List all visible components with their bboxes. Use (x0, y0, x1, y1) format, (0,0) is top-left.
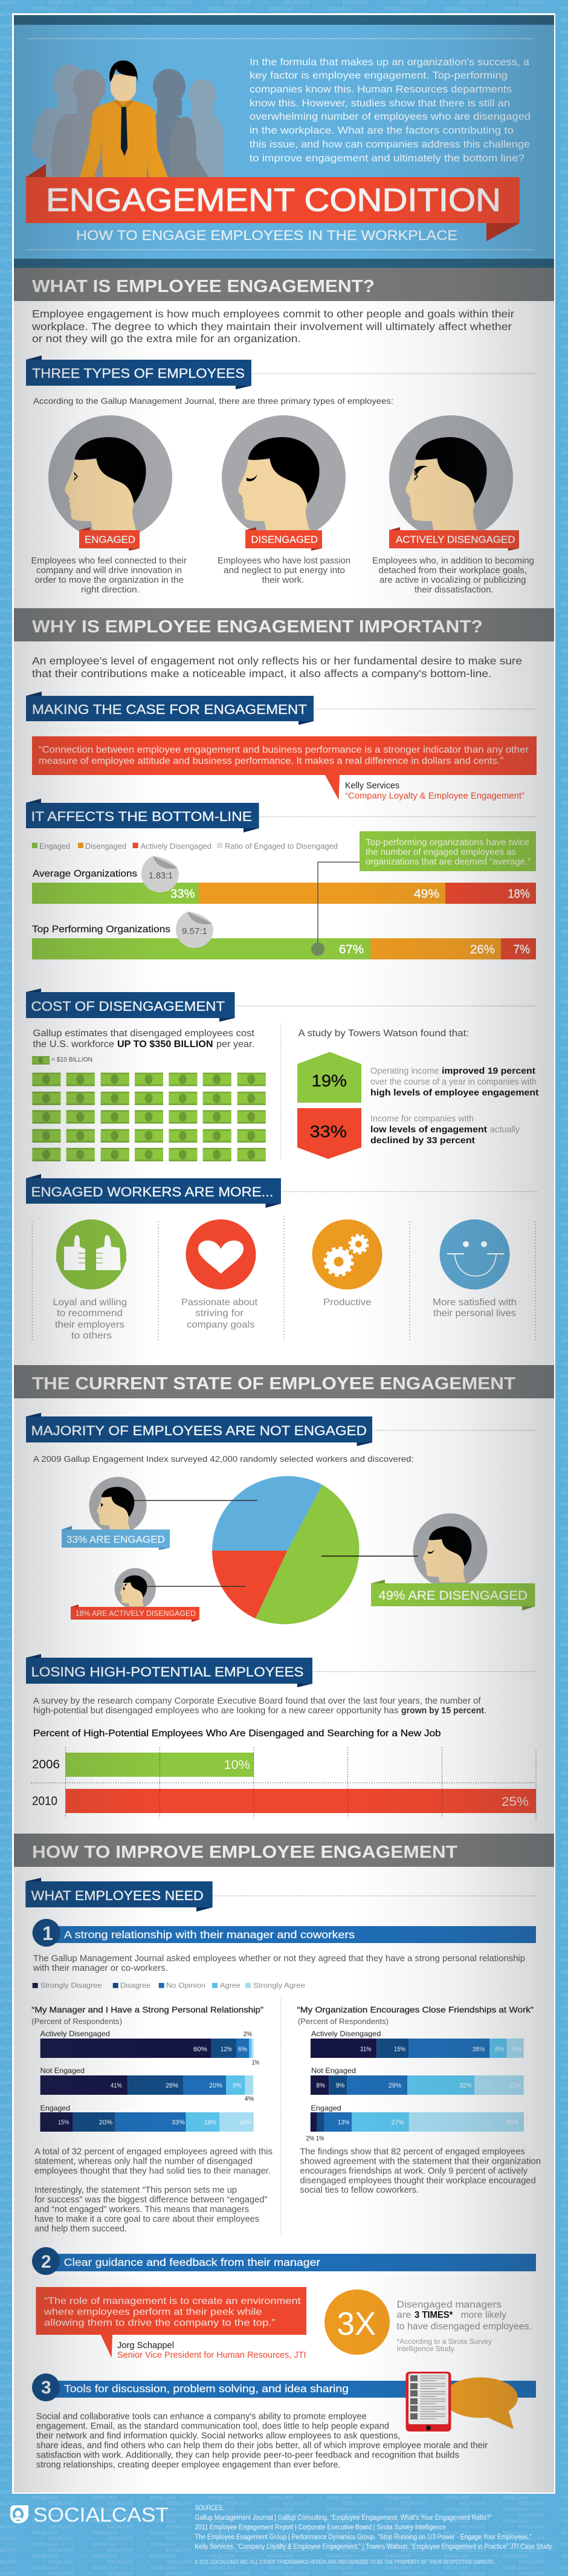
chart: manager relationship (31, 2005, 263, 2132)
text block: why important (32, 655, 522, 680)
panel: loyal: to recommend (57, 1308, 123, 1319)
panel: loyal: to others (71, 1331, 112, 1341)
text block: corporate executive board survey: . (484, 1706, 486, 1716)
section heading: current state: THE CURRENT STATE OF EMPLOYEE ENGAGEMENT (32, 1374, 515, 1393)
text block: manager findings: employees thought that they had solid ties to their manager. (34, 2166, 271, 2176)
panel: disengaged employee: Employees who have lost passion (218, 556, 350, 566)
stat: 19 percent: high levels of employee engagement (370, 1088, 539, 1098)
text block: manager findings (34, 2147, 273, 2234)
ribbon: what employees need: WHAT EMPLOYEES NEED (31, 1888, 204, 1903)
legend: bill equals ten billion: = $10 BILLION (51, 1056, 92, 1063)
panel: disengaged employee (218, 415, 350, 585)
text: towers watson intro: A study by Towers Watson found that: (299, 1028, 469, 1039)
step 3 banner: 3 (41, 2378, 51, 2398)
panel: actively disengaged employee: their dissatisfaction. (415, 585, 493, 595)
ribbon: cost of disengagement (26, 988, 234, 1022)
stat: 19 percent: Operating income (370, 1066, 439, 1076)
intro text: overwhelming number of employees who are disengaged (250, 111, 531, 122)
panel: passionate (181, 1219, 258, 1330)
stacked bar: not engaged (40, 2066, 254, 2103)
text block: cost estimate: per year. (216, 1039, 254, 1050)
text block: gallup question: The Gallup Management Journal asked employees whether or not they agreed that they have a strong personal relationship (33, 1954, 525, 1964)
callout: Kelly Services quote: “Company Loyalty & Employee Engagement” (345, 791, 524, 801)
stat: 19 percent (297, 1052, 539, 1103)
panel: passionate: Passionate about (181, 1297, 258, 1308)
stacked bar: engaged: 55% (506, 2119, 519, 2126)
stat: 33 percent: declined by 33 percent (370, 1136, 475, 1146)
stat: 19 percent: 19% (312, 1071, 347, 1090)
stacked bar: actively disengaged: 15% (394, 2046, 405, 2053)
ribbon: engaged workers are more (26, 1174, 281, 1208)
stacked bar: actively disengaged: 12% (221, 2046, 232, 2053)
panel: satisfied: More satisfied with (433, 1297, 517, 1308)
text block: cost estimate: UP TO $350 BILLION (117, 1039, 213, 1050)
text block: social tools: satisfaction with work. Additionally, they can help provide peer-to-peer feedback and recognition that builds (36, 2451, 459, 2461)
bar chart: average organizations: Average Organizations (33, 869, 137, 879)
stacked bar: not engaged: 20% (209, 2082, 222, 2089)
text block: social tools (36, 2412, 488, 2470)
ribbon: what employees need (25, 1878, 213, 1912)
stat: 33 percent: low levels of engagement (370, 1125, 487, 1135)
text block: social tools: strong relationships, creating deeper employee engagement than ever before. (36, 2461, 341, 2470)
stacked bar: not engaged: 32% (459, 2082, 472, 2089)
text block: friendship findings: The findings show that 82 percent of engaged employees (300, 2147, 525, 2156)
chart: organization friendships: (Percent of Respondents) (298, 2017, 389, 2026)
callout: Kelly Services quote: “Connection between employee engagement and business performance is a stronger indicator than any other (39, 745, 529, 755)
callout: 33 percent engaged: 33% ARE ENGAGED (66, 1534, 165, 1545)
stacked bar: actively disengaged: 31% (360, 2046, 371, 2053)
text block: friendship findings: social ties to fellow coworkers. (300, 2185, 419, 2195)
ratio badge: 9.57:1 (176, 912, 213, 948)
step 1 banner: A strong relationship with their manager and coworkers (64, 1929, 355, 1941)
legend: engagement categories: Actively Disengaged (141, 842, 211, 851)
section heading: what is employee engagement (14, 268, 554, 301)
stacked bar: actively disengaged: 38% (473, 2046, 485, 2053)
pie chart (212, 1476, 359, 1624)
intro text (250, 57, 531, 164)
section heading: how to improve: HOW TO IMPROVE EMPLOYEE ENGAGEMENT (32, 1843, 457, 1862)
ratio badge: 1.83:1: 1.83:1 (149, 871, 173, 881)
text block: corporate executive board survey: A survey by the research company Corporate Executive Board found that over the last four years, the number of (33, 1696, 482, 1706)
chart: manager relationship: “My Manager and I Have a Strong Personal Relationship” (31, 2005, 263, 2014)
text block: social tools: their network and find information quickly. Social networks allow employees to ask questions, (36, 2432, 400, 2441)
legend: agreement scale: Disagree (120, 1981, 150, 1990)
text block: manager findings: and “not engaged” workers. This means that managers (34, 2205, 249, 2214)
panel: satisfied: their personal lives (433, 1308, 516, 1319)
ratio badge: 1.83:1 (141, 856, 179, 892)
icon: heart (186, 1219, 256, 1290)
stacked bar: actively disengaged: 2% (244, 2031, 252, 2038)
legend: agreement scale: Strongly Agree (253, 1981, 305, 1990)
stacked bar: not engaged (311, 2066, 524, 2095)
text block: gallup question (33, 1954, 525, 1973)
text block: definition (31, 308, 514, 345)
step 3 banner: Tools for discussion, problem solving, and idea sharing (64, 2383, 349, 2395)
stat: 33 percent: 33% (310, 1122, 347, 1141)
chart: manager relationship: (Percent of Respondents) (31, 2017, 122, 2026)
icon: phone with speech bubble (406, 2372, 518, 2432)
bar chart: top performing organizations: 7% (514, 943, 530, 956)
icon: thumbs up (56, 1219, 126, 1290)
section heading: why is employee engagement important (14, 608, 554, 641)
stacked bar: actively disengaged: Actively Disengaged (40, 2029, 110, 2038)
bar chart: high-potential employees (31, 1747, 536, 1821)
panel: actively disengaged employee: Employees who, in addition to becoming (372, 556, 534, 566)
ribbon: making the case for engagement (26, 692, 314, 725)
callout: 18 percent actively disengaged: 18% ARE ACTIVELY DISENGAGED (76, 1609, 196, 1618)
panel: actively disengaged employee (372, 415, 534, 595)
stacked bar: engaged (306, 2104, 524, 2143)
stacked bar: actively disengaged (40, 2029, 259, 2066)
legend: bill equals ten billion (32, 1056, 92, 1065)
ribbon: it affects the bottom-line (26, 799, 259, 832)
stat: 3X: are (396, 2310, 411, 2320)
logo: Socialcast: SOCIALCAST (33, 2503, 169, 2526)
panel: disengaged employee: and neglect to put energy into (224, 566, 345, 576)
stacked bar: not engaged: 8% (316, 2082, 325, 2089)
stat: 33 percent (297, 1108, 520, 1159)
panel: engaged employee: company and will drive innovation in (36, 566, 182, 576)
panel: passionate: company goals (187, 1320, 255, 1330)
stacked bar: engaged: Engaged (40, 2104, 70, 2112)
text block: corporate executive board survey: high-potential but disengaged employees who are looking for a new career opportunity has (33, 1706, 399, 1716)
intro text: know this. However, studies show that there is still an (250, 98, 510, 109)
section heading: what is employee engagement: WHAT IS EMPLOYEE ENGAGEMENT? (32, 277, 375, 296)
text block: manager findings: have to make it a core goal to care about their employees (34, 2214, 259, 2224)
legend: engagement categories (32, 842, 338, 851)
panel: passionate: striving for (195, 1308, 244, 1319)
stat: 3X (324, 2289, 532, 2355)
stacked bar: engaged (40, 2104, 254, 2132)
intro text: In the formula that makes up an organization's success, a (250, 57, 530, 68)
callout: Jorg Schappel quote: “The role of management is to create an environment (44, 2296, 301, 2306)
callout: Jorg Schappel quote: Senior Vice President for Human Resources, JTI (117, 2351, 306, 2360)
stacked bar: actively disengaged: 8% (495, 2046, 504, 2053)
bar chart: top performing organizations (32, 924, 536, 959)
text block: why important: An employee's level of engagement not only reflects his or her fundamental desire to make sure (32, 655, 522, 667)
panel: disengaged employee: their work. (262, 576, 305, 585)
bar chart: high-potential employees: 2006 (32, 1758, 60, 1771)
text: gallup index intro: A 2009 Gallup Engagement Index surveyed 42,000 randomly selected workers and discovered: (33, 1454, 414, 1464)
sources: SOURCES: (195, 2505, 224, 2512)
bar chart: average organizations: 33% (170, 887, 195, 901)
stacked bar: engaged: 13% (338, 2119, 350, 2126)
ribbon: making the case for engagement: MAKING THE CASE FOR ENGAGEMENT (32, 702, 307, 717)
chart: organization friendships (297, 2005, 534, 2143)
legend: agreement scale: No Opinion (166, 1981, 205, 1990)
text block: friendship findings: encourages friendships at work. Only 9 percent of actively (300, 2166, 528, 2176)
step 1 banner (33, 1919, 536, 1947)
icon: shield (10, 2505, 28, 2523)
stacked bar: not engaged: 9% (336, 2082, 344, 2089)
chart: organization friendships: “My Organization Encourages Close Friendships at Work” (297, 2005, 534, 2014)
stacked bar: actively disengaged: 9% (512, 2046, 521, 2053)
stacked bar: not engaged: 9% (233, 2082, 241, 2089)
bar chart: high-potential employees: 10% (224, 1758, 250, 1772)
stacked bar: not engaged: 26% (166, 2082, 178, 2089)
legend: engagement categories: Disengaged (85, 842, 126, 851)
stacked bar: not engaged: 4% (245, 2095, 254, 2103)
icon grid: dollar bills (32, 1072, 266, 1161)
stacked bar: not engaged: 21% (509, 2082, 521, 2089)
stacked bar: actively disengaged: 1% (252, 2059, 259, 2066)
text: according to gallup: According to the Gallup Management Journal, there are three primary types of employees: (33, 396, 393, 406)
sources: 2011 Employee Engagement Report | Corporate Executive Board | Sirota Survey Intelligence (195, 2524, 446, 2531)
panel: productive: Productive (323, 1297, 371, 1308)
panel: engaged employee: Employees who feel connected to their (31, 556, 187, 566)
stat: 3X: to have disengaged employees. (396, 2321, 532, 2332)
legend: agreement scale: Agree (220, 1981, 240, 1990)
callout: 49 percent disengaged (321, 1513, 535, 1611)
panel: engaged employee (31, 415, 187, 595)
callout: Jorg Schappel quote: where employees perform at their peek while (44, 2307, 262, 2317)
step 2 banner (32, 2247, 536, 2275)
stacked bar: engaged: 16% (204, 2119, 217, 2126)
text block: friendship findings: showed agreement with the statement that their organization (300, 2156, 541, 2166)
illustration: group of employees (32, 60, 224, 177)
bar chart: high-potential employees: 25% (502, 1795, 529, 1809)
callout: Jorg Schappel quote: allowing them to drive the company to the top.” (44, 2318, 276, 2328)
panel: header (14, 15, 554, 268)
legend: agreement scale: Strongly Disagree (40, 1981, 102, 1990)
stat: 33 percent: Income for companies with (370, 1114, 474, 1124)
sources: Gallup Management Journal | Gallup Consulting. “Employee Engagement: What's Your Engagement Ratio?” (195, 2514, 492, 2522)
bar chart: top performing organizations: Top Performing Organizations (32, 924, 170, 935)
step 2 banner: Clear guidance and feedback from their manager (64, 2256, 320, 2268)
subtitle: HOW TO ENGAGE EMPLOYEES IN THE WORKPLACE (76, 227, 457, 243)
panel: disengaged employee: DISENGAGED (251, 534, 318, 545)
stacked bar: actively disengaged: Actively Disengaged (311, 2029, 381, 2038)
panel: loyal (53, 1219, 127, 1341)
text block: gallup question: with their manager or co-workers. (33, 1964, 168, 1973)
stacked bar: engaged: 2% 1% (306, 2135, 324, 2143)
text block: definition: workplace. The degree to which they maintain their involvement will ultimately affect whether (31, 320, 512, 333)
ratio badge: 9.57:1: 9.57:1 (182, 926, 207, 936)
text block: manager findings: for success” was the biggest difference between “engaged” (34, 2195, 268, 2205)
stacked bar: actively disengaged (311, 2029, 524, 2058)
text block: cost estimate: the U.S. workforce (33, 1039, 114, 1050)
stacked bar: engaged: 20% (99, 2119, 112, 2126)
sources: The Employee Enagement Group | Performance Dynamics Group. “Stop Running on 1/3 Power - Engage Your Employees.” (195, 2534, 532, 2541)
ribbon: majority not engaged: MAJORITY OF EMPLOYEES ARE NOT ENGAGED (31, 1423, 367, 1438)
panel: actively disengaged employee: are active in vocalizing or publicizing (379, 576, 526, 585)
stacked bar: not engaged: 41% (111, 2082, 122, 2089)
stacked bar: engaged: Engaged (311, 2104, 341, 2112)
bar chart: average organizations: 18% (508, 887, 530, 901)
callout: 49 percent disengaged: 49% ARE DISENGAGED (378, 1589, 528, 1603)
callout: top performers twice as engaged: the number of engaged employees as (366, 848, 516, 857)
stat: 3X: Disengaged managers (396, 2300, 502, 2310)
text block: definition: Employee engagement is how much employees commit to other people and goals within their (32, 308, 514, 320)
intro text: companies know this. Human Resources departments (250, 84, 512, 95)
panel: productive (312, 1219, 382, 1308)
callout: Jorg Schappel quote: Jorg Schappel (117, 2341, 174, 2351)
callout: Kelly Services quote (32, 736, 537, 801)
panel: engaged employee: ENGAGED (85, 534, 135, 545)
intro text: this issue, and how can companies address this challenge (250, 139, 530, 150)
callout: top performers twice as engaged (311, 831, 536, 956)
text block: cost estimate: Gallup estimates that disengaged employees cost (33, 1028, 255, 1039)
stacked bar: actively disengaged: 6% (238, 2046, 247, 2053)
bar chart: average organizations (32, 869, 536, 904)
sources (195, 2505, 553, 2551)
callout: Jorg Schappel quote (36, 2287, 306, 2360)
callout: top performers twice as engaged: organizations that are deemed “average.” (366, 857, 531, 867)
panel: actively disengaged employee: ACTIVELY DISENGAGED (396, 534, 515, 545)
callout: Kelly Services quote: measure of employee attitude and business performance. It makes a real difference in dollars and cents.” (39, 756, 503, 767)
stat: 3X: 3X (337, 2306, 376, 2342)
step 2 banner: 2 (41, 2252, 51, 2272)
intro text: key factor is employee engagement. Top-performing (250, 70, 508, 81)
stat: 33 percent: actually (490, 1125, 520, 1135)
text block: why important: that their contributions make a noticeable impact, it also affects a company's bottom-line. (32, 667, 492, 680)
stacked bar: actively disengaged: 60% (193, 2046, 207, 2053)
icon: smiley (440, 1219, 510, 1290)
bar chart: top performing organizations: 67% (339, 943, 364, 956)
stat: 19 percent: over the course of a year in companies with (370, 1077, 537, 1087)
bar chart: top performing organizations: 26% (470, 943, 495, 956)
text block: cost estimate (33, 1028, 255, 1050)
stat: 19 percent: improved 19 percent (442, 1066, 535, 1076)
stacked bar: engaged: 15% (58, 2119, 69, 2126)
text block: corporate executive board survey (33, 1696, 486, 1716)
stat: 3X: 3 TIMES* (415, 2310, 453, 2320)
callout: 33 percent engaged (62, 1477, 257, 1550)
legend: engagement categories: Engaged (39, 842, 70, 851)
intro text: in the workplace. What are the factors contributing to (250, 125, 514, 136)
section heading: current state (14, 1365, 554, 1398)
stacked bar: not engaged: Not Engaged (40, 2066, 85, 2075)
panel: engaged employee: right direction. (81, 585, 140, 595)
step 1 banner: 1 (42, 1922, 53, 1944)
ribbon: engaged workers are more: ENGAGED WORKERS ARE MORE... (31, 1184, 273, 1199)
stat: 3X: more likely (461, 2310, 506, 2320)
text block: friendship findings (300, 2147, 541, 2195)
panel: actively disengaged employee: detached from their workplace goals, (378, 566, 527, 576)
text block: social tools: Social and collaborative tools can enhance a company's ability to promote employee (36, 2412, 367, 2422)
ribbon: majority not engaged (26, 1413, 372, 1446)
callout: 18 percent actively disengaged (71, 1568, 245, 1622)
text block: manager findings: and help them succeed. (34, 2224, 127, 2234)
text block: social tools: engagement. Email, as the standard communication tool, does little to help people expand (36, 2422, 389, 2432)
panel: loyal: their employers (55, 1320, 124, 1330)
legend: engagement categories: Ratio of Engaged to Disengaged (225, 842, 338, 851)
text block: manager findings: statement, whereas only half the number of disengaged (34, 2156, 253, 2166)
panel: loyal: Loyal and willing (53, 1297, 127, 1308)
ribbon: losing high-potential employees: LOSING HIGH-POTENTIAL EMPLOYEES (31, 1664, 303, 1679)
stacked bar: not engaged: Not Engaged (311, 2066, 356, 2075)
stat: 3X: *According to a Sirota Survey (396, 2338, 492, 2346)
ribbon: cost of disengagement: COST OF DISENGAGEMENT (31, 999, 225, 1014)
step 3 banner (32, 2373, 536, 2401)
panel: engaged employee: order to move the organization in the (35, 576, 184, 585)
text block: definition: or not they will go the extra mile for an organization. (32, 333, 301, 345)
text block: social tools: share ideas, and find others who can help them do their jobs better, all of which improve employee morale and their (36, 2441, 488, 2451)
stat: 3X: Intelligence Study. (396, 2346, 456, 2353)
chart title: percent of high-potential employees: Percent of High-Potential Employees Who Are Disengaged and Searching for a New Job (33, 1728, 441, 1739)
section heading: how to improve (14, 1834, 554, 1867)
icon: gears (312, 1219, 382, 1290)
panel: satisfied (433, 1219, 517, 1319)
stacked bar: not engaged: 29% (389, 2082, 402, 2089)
text block: friendship findings: disengaged employees thought their workplace encouraged (300, 2176, 536, 2185)
stacked bar: engaged: 27% (392, 2119, 404, 2126)
ribbon: it affects the bottom-line: IT AFFECTS THE BOTTOM-LINE (31, 809, 252, 824)
bar chart: average organizations: 49% (414, 887, 439, 901)
callout: Kelly Services quote: Kelly Services (345, 781, 399, 791)
title ribbon: ENGAGEMENT CONDITION (46, 182, 501, 218)
ribbon: losing high-potential employees (26, 1654, 312, 1687)
text block: manager findings: Interestingly, the statement “This person sets me up (34, 2185, 237, 2195)
title ribbon (26, 164, 520, 241)
ribbon: three types of employees (26, 355, 251, 389)
callout: top performers twice as engaged: Top-performing organizations have twice (366, 838, 529, 848)
stacked bar: engaged: 16% (239, 2119, 251, 2126)
text block: corporate executive board survey: grown by 15 percent (401, 1706, 484, 1716)
stacked bar: engaged: 33% (172, 2119, 185, 2126)
section heading: why is employee engagement important: WHY IS EMPLOYEE ENGAGEMENT IMPORTANT? (32, 617, 483, 637)
legend: agreement scale (33, 1981, 305, 1990)
ribbon: three types of employees: THREE TYPES OF EMPLOYEES (32, 366, 245, 381)
intro text: to improve engagement and ultimately the bottom line? (250, 153, 524, 164)
bar chart: high-potential employees: 2010 (32, 1795, 57, 1808)
text block: manager findings: A total of 32 percent of engaged employees agreed with this (34, 2147, 273, 2156)
